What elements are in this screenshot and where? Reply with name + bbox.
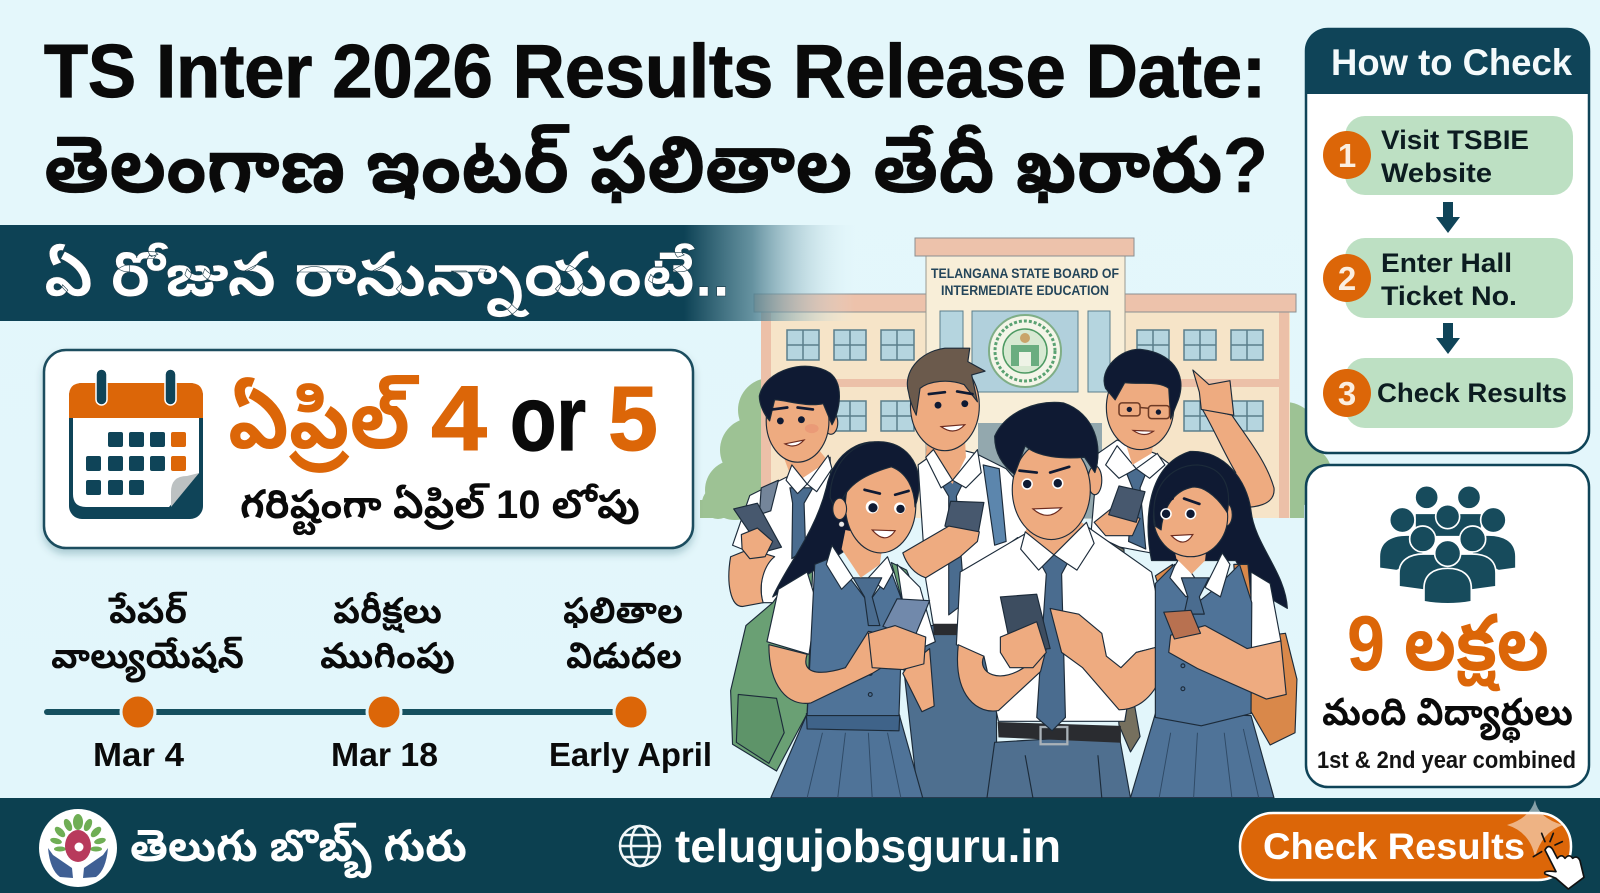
sparkle <box>1507 800 1563 857</box>
timeline labels <box>51 590 683 683</box>
student: front left girl <box>731 442 935 798</box>
step 2: 2 <box>1338 260 1356 297</box>
stat note: 1st & 2nd year combined <box>1317 747 1576 774</box>
icon: calendar <box>69 369 203 519</box>
timeline labels: పరీక్షలు <box>333 590 442 633</box>
stat label: మంది విద్యార్థులు <box>1322 692 1573 743</box>
date headline <box>228 368 658 473</box>
panel: release date card <box>44 350 693 548</box>
title: line one: TS Inter 2026 Results Release Date: <box>44 29 1266 113</box>
student: rear centre boy <box>899 348 1029 798</box>
icon: group of people <box>1379 486 1516 604</box>
timeline dates: Early April <box>549 736 712 773</box>
building sign: TELANGANA STATE BOARD OF <box>931 266 1119 281</box>
panel header: How to Check <box>1331 42 1572 83</box>
timeline track and dots <box>44 695 648 729</box>
step 3 <box>1323 358 1573 428</box>
center tower <box>915 238 1134 518</box>
building sign: INTERMEDIATE EDUCATION <box>941 283 1109 298</box>
arrow: step 1 to 2 <box>1436 202 1460 233</box>
website url: telugujobsguru.in <box>675 820 1061 872</box>
left wing <box>754 294 931 518</box>
tree left <box>700 378 830 520</box>
illustration: school building <box>700 238 1332 520</box>
timeline dates <box>93 736 712 773</box>
student: rear left boy <box>729 366 839 606</box>
board seal <box>989 315 1061 387</box>
step 2 <box>1323 238 1573 318</box>
step 1: 1 <box>1338 137 1356 174</box>
banner: sub-heading band <box>0 225 855 321</box>
timeline dates: Mar 18 <box>331 736 438 773</box>
stat number: 9 లక్షల <box>1347 599 1549 692</box>
student: front centre boy <box>956 402 1167 798</box>
button: check results <box>1240 813 1571 880</box>
date headline: or <box>510 368 586 470</box>
brand name: తెలుగు బొబ్బ్ గురు <box>130 822 467 879</box>
step 1: Website <box>1381 158 1492 188</box>
arrow: step 2 to 3 <box>1436 323 1460 354</box>
step 2: Enter Hall <box>1381 248 1512 278</box>
timeline labels: విడుదల <box>566 635 682 676</box>
timeline labels: వాల్యుయేషన్ <box>51 635 244 683</box>
date headline: 5 <box>608 368 658 470</box>
icon: globe <box>620 826 660 866</box>
panel header <box>1306 29 1589 94</box>
logo <box>39 809 117 887</box>
title: line two: తెలంగాణ ఇంటర్ ఫలితాల తేదీ ఖరారు? <box>44 121 1268 209</box>
timeline labels: పేపర్ <box>108 590 187 631</box>
step 3: Check Results <box>1377 378 1567 408</box>
panel: how to check <box>1306 29 1589 453</box>
step 1: Visit TSBIE <box>1381 125 1529 155</box>
step 2: Ticket No. <box>1381 281 1517 311</box>
date sub-line: గరిష్టంగా ఏప్రిల్ 10 లోపు <box>240 483 640 536</box>
icon: pointer hand <box>1533 833 1584 889</box>
step 3: 3 <box>1338 375 1356 412</box>
tree right <box>1246 402 1332 518</box>
date headline: 4 <box>431 368 487 470</box>
footer bar <box>0 798 1600 893</box>
panel: student count <box>1306 465 1589 787</box>
timeline dates: Mar 4 <box>93 736 185 773</box>
student: rear right boy with glasses, pointing <box>1090 349 1274 557</box>
timeline labels: ముగింపు <box>320 635 455 676</box>
right wing <box>1120 294 1296 518</box>
student: front right girl <box>1130 451 1297 798</box>
building sign <box>931 266 1119 298</box>
illustration: students with phones <box>729 348 1297 798</box>
button: check results: Check Results <box>1263 826 1525 867</box>
banner text: ఏ రోజున రానున్నాయంటే.. <box>44 241 730 318</box>
date headline: ఏప్రిల్ <box>228 372 420 473</box>
timeline <box>44 590 712 773</box>
step 1 <box>1323 116 1573 195</box>
timeline labels: ఫలితాల <box>563 590 683 631</box>
